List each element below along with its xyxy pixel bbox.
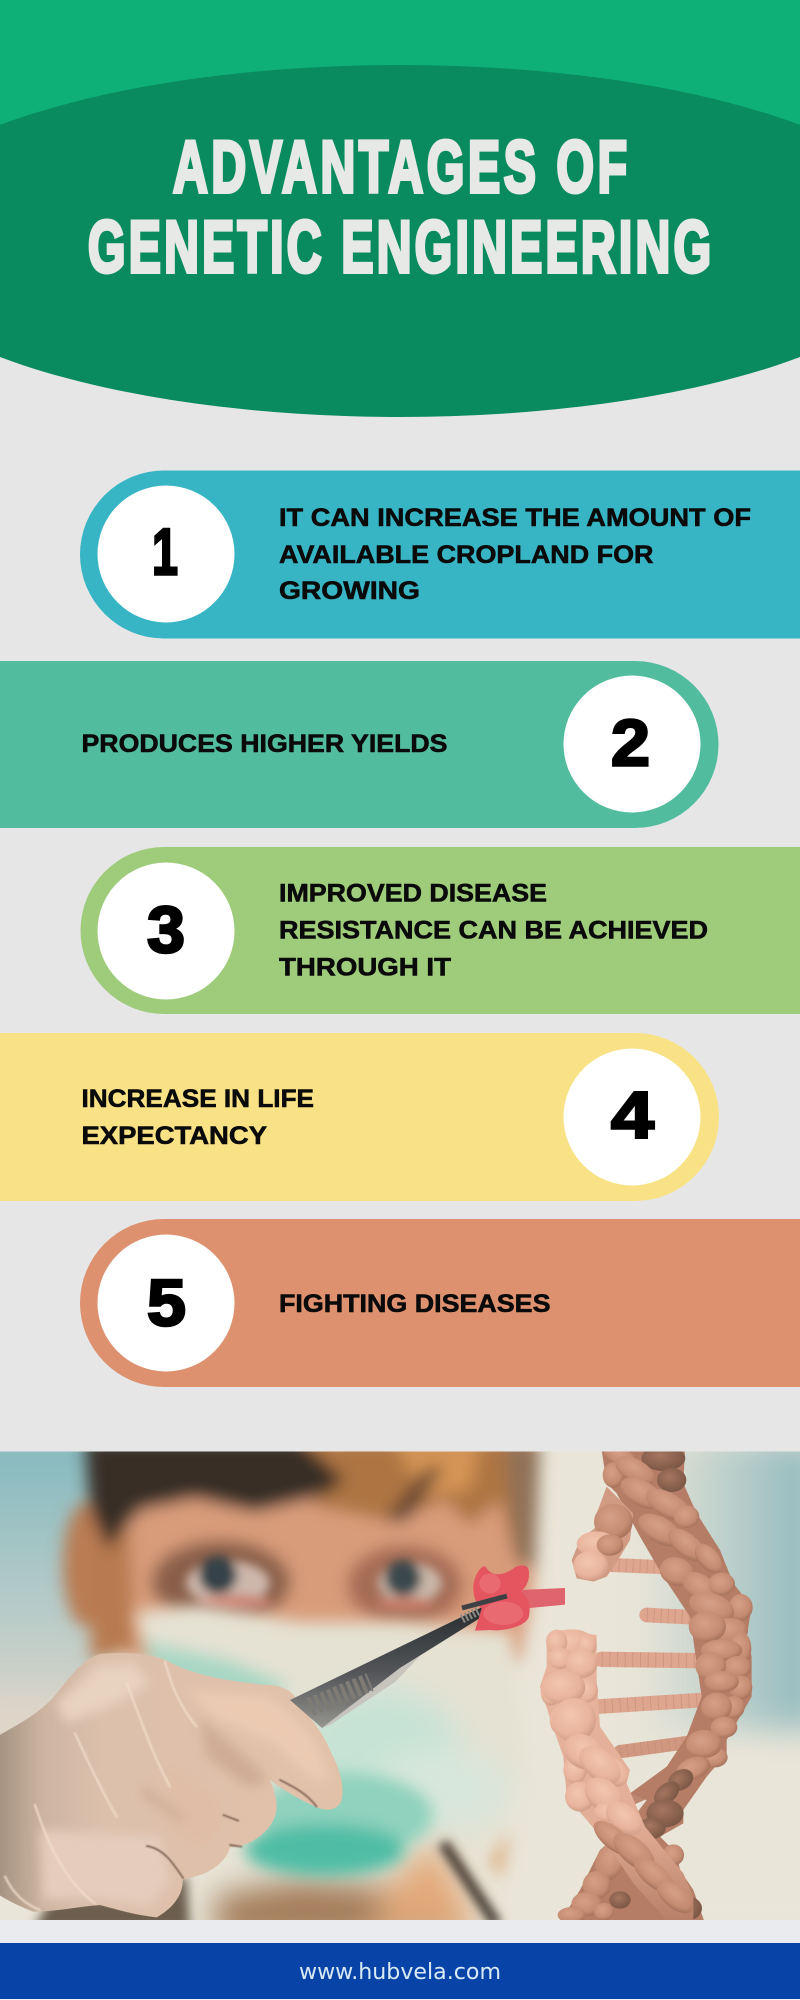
footer url: www.hubvela.com: [299, 1960, 501, 1985]
text: advantage 1: [279, 504, 751, 605]
strip under photo: [0, 1920, 800, 1943]
number badge 1: [98, 486, 234, 622]
title: [88, 127, 711, 289]
title: ADVANTAGES OF: [173, 127, 627, 209]
number badge 2: [564, 676, 700, 812]
DNA rungs: [597, 1565, 703, 1798]
number badge 4: 4: [611, 1078, 654, 1152]
number badge 3: 3: [147, 892, 185, 966]
text: advantage 1: IT CAN INCREASE THE AMOUNT OF: [279, 504, 751, 532]
text: advantage 4: EXPECTANCY: [82, 1122, 267, 1150]
tweezers: [290, 1606, 482, 1728]
photo: gloved hand, tweezers and DNA helix: [0, 1439, 800, 1950]
panel: advantage 2: [0, 661, 718, 828]
text: advantage 3: RESISTANCE CAN BE ACHIEVED: [279, 916, 708, 944]
text: advantage 3: IMPROVED DISEASE: [279, 880, 547, 908]
number badge 5: 5: [147, 1266, 186, 1340]
panel: advantage 4: [0, 1033, 719, 1201]
text: advantage 3: THROUGH IT: [279, 954, 451, 982]
DNA right strand: [558, 1439, 753, 1923]
text: advantage 4: INCREASE IN LIFE: [82, 1085, 314, 1113]
number badge 1: 1: [152, 514, 178, 588]
red DNA fragment held by tweezers: [473, 1565, 565, 1631]
title: GENETIC ENGINEERING: [88, 207, 711, 289]
number badge 4: [564, 1048, 700, 1186]
footer bar: [0, 1943, 800, 1999]
number badge 3: [98, 862, 234, 1000]
text: advantage 4: [82, 1085, 314, 1150]
panel: advantage 5: [80, 1219, 800, 1387]
panel: advantage 1: [80, 470, 800, 638]
text: advantage 5: FIGHTING DISEASES: [279, 1290, 550, 1318]
upper fragment: [572, 1487, 633, 1582]
blurred background: scientist face: [0, 1440, 800, 1950]
number badge 2: 2: [611, 706, 650, 780]
text: advantage 1: AVAILABLE CROPLAND FOR: [279, 541, 654, 569]
glove creases: [5, 1662, 197, 1910]
gloved hand: [0, 1653, 343, 1930]
text: advantage 2: PRODUCES HIGHER YIELDS: [82, 730, 448, 758]
panel: advantage 3: [81, 847, 800, 1014]
text: advantage 1: GROWING: [279, 577, 420, 605]
DNA left strand: [540, 1487, 699, 1920]
number badge 5: [98, 1234, 234, 1372]
header banner: [0, 0, 800, 417]
text: advantage 3: [279, 880, 708, 982]
